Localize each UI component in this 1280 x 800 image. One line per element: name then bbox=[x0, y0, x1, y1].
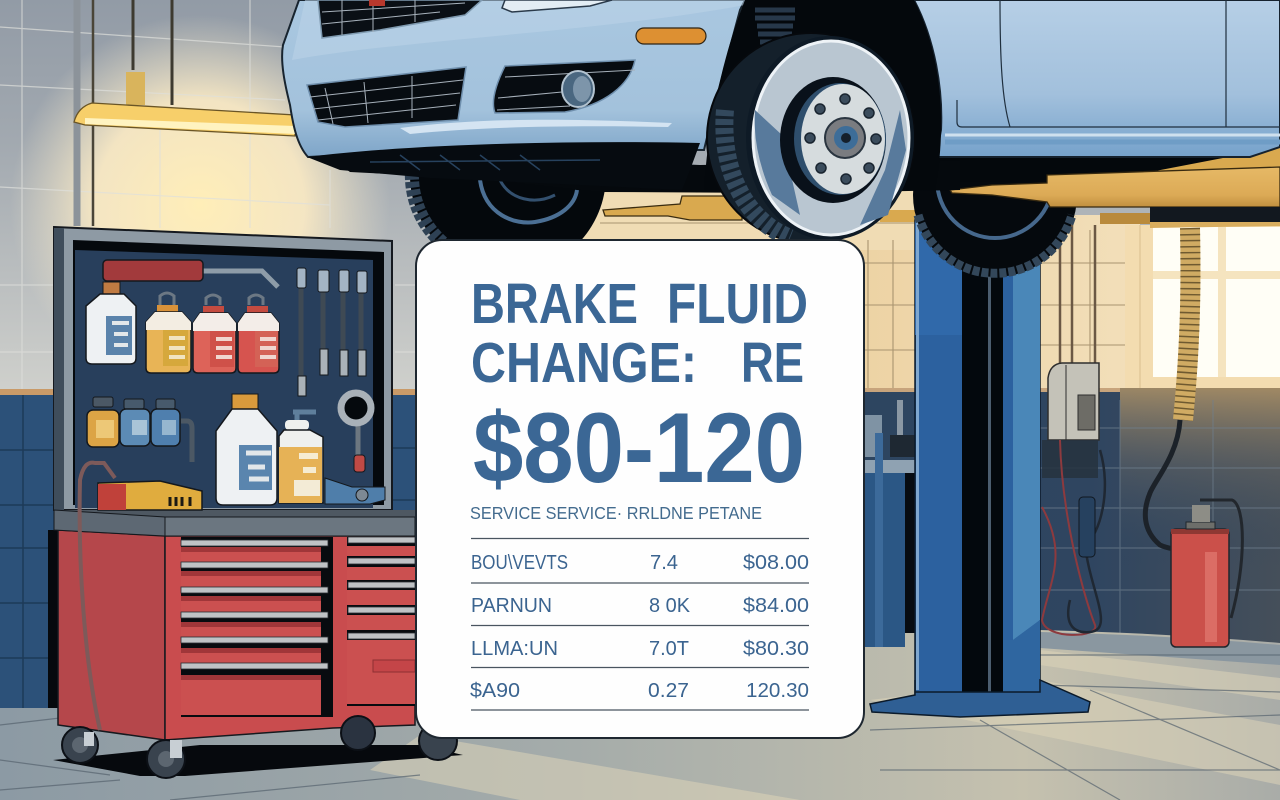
table: $84.00 bbox=[743, 595, 809, 617]
red bottle two bbox=[238, 295, 279, 373]
underbody black band bbox=[930, 150, 1280, 182]
red tool cabinet bbox=[48, 530, 415, 740]
table: BOU\VEVTS bbox=[471, 552, 568, 574]
dark lower wall right bbox=[860, 388, 1280, 643]
red bottle one bbox=[193, 295, 236, 373]
hanging wrenches bbox=[297, 268, 367, 396]
table: $08.00 bbox=[743, 552, 809, 574]
blue lower wall left bbox=[0, 389, 422, 708]
front car wheel bbox=[707, 33, 915, 243]
workbench top bbox=[54, 510, 415, 536]
cabinet casters and shadow bbox=[53, 716, 463, 778]
small bottles bbox=[87, 397, 192, 462]
lift arm right bbox=[950, 147, 1280, 228]
right rear wheel bbox=[913, 113, 1077, 277]
pegboard panel bbox=[54, 227, 392, 510]
fog lamp bbox=[493, 60, 635, 113]
post base plate bbox=[870, 680, 1090, 717]
table: LLMA:UN bbox=[471, 638, 558, 660]
price card bbox=[416, 240, 864, 738]
upper grille bbox=[318, 0, 482, 38]
lift arm behind wheel bbox=[603, 196, 915, 222]
subheading: SERVICE SERVICE· RRLDNE PETANE bbox=[470, 503, 762, 523]
garage floor bbox=[0, 630, 1280, 800]
car front body bbox=[282, 0, 745, 190]
table: 8 0K bbox=[649, 595, 691, 617]
rear car wheel left bbox=[404, 176, 604, 242]
amber marker bbox=[636, 28, 706, 44]
wheel arch bbox=[704, 0, 941, 190]
big white jug bbox=[216, 394, 277, 505]
table: 7.4 bbox=[650, 552, 678, 574]
ring tool bbox=[341, 393, 371, 472]
heading: RE bbox=[741, 331, 804, 395]
table bbox=[470, 538, 809, 710]
price: $80-120 bbox=[473, 392, 805, 503]
car side body bbox=[914, 0, 1280, 157]
heading: CHANGE: bbox=[471, 331, 697, 395]
suspension spring bbox=[755, 10, 795, 42]
table: 7.0T bbox=[649, 638, 689, 660]
table: 0.27 bbox=[648, 680, 689, 702]
heading: FLUID bbox=[667, 272, 808, 336]
small blue jack bbox=[325, 478, 385, 504]
heading: BRAKE bbox=[471, 272, 638, 336]
wall equipment and cables bbox=[1042, 225, 1105, 635]
oil drain hose bbox=[1145, 228, 1229, 550]
car underbody shadow bbox=[320, 150, 960, 193]
table: PARNUN bbox=[471, 595, 552, 617]
headlight bbox=[502, 0, 612, 12]
white bottle bbox=[86, 282, 136, 364]
car lift post bbox=[870, 220, 1090, 717]
lower grille bbox=[307, 67, 466, 127]
table: $A90 bbox=[470, 680, 520, 702]
wall pipes and cables bbox=[77, 0, 172, 226]
red drain canister bbox=[1171, 500, 1242, 647]
brake tool bbox=[103, 260, 278, 287]
window bbox=[1125, 225, 1280, 388]
table: $80.30 bbox=[743, 638, 809, 660]
table: 120.30 bbox=[746, 680, 809, 702]
yellow bottle bbox=[146, 293, 191, 373]
background workbench bbox=[865, 400, 915, 647]
battery charger with cable bbox=[80, 463, 202, 730]
heading bbox=[471, 272, 808, 395]
ceiling light fixture bbox=[74, 0, 295, 136]
yellow pump bottle bbox=[279, 412, 323, 503]
